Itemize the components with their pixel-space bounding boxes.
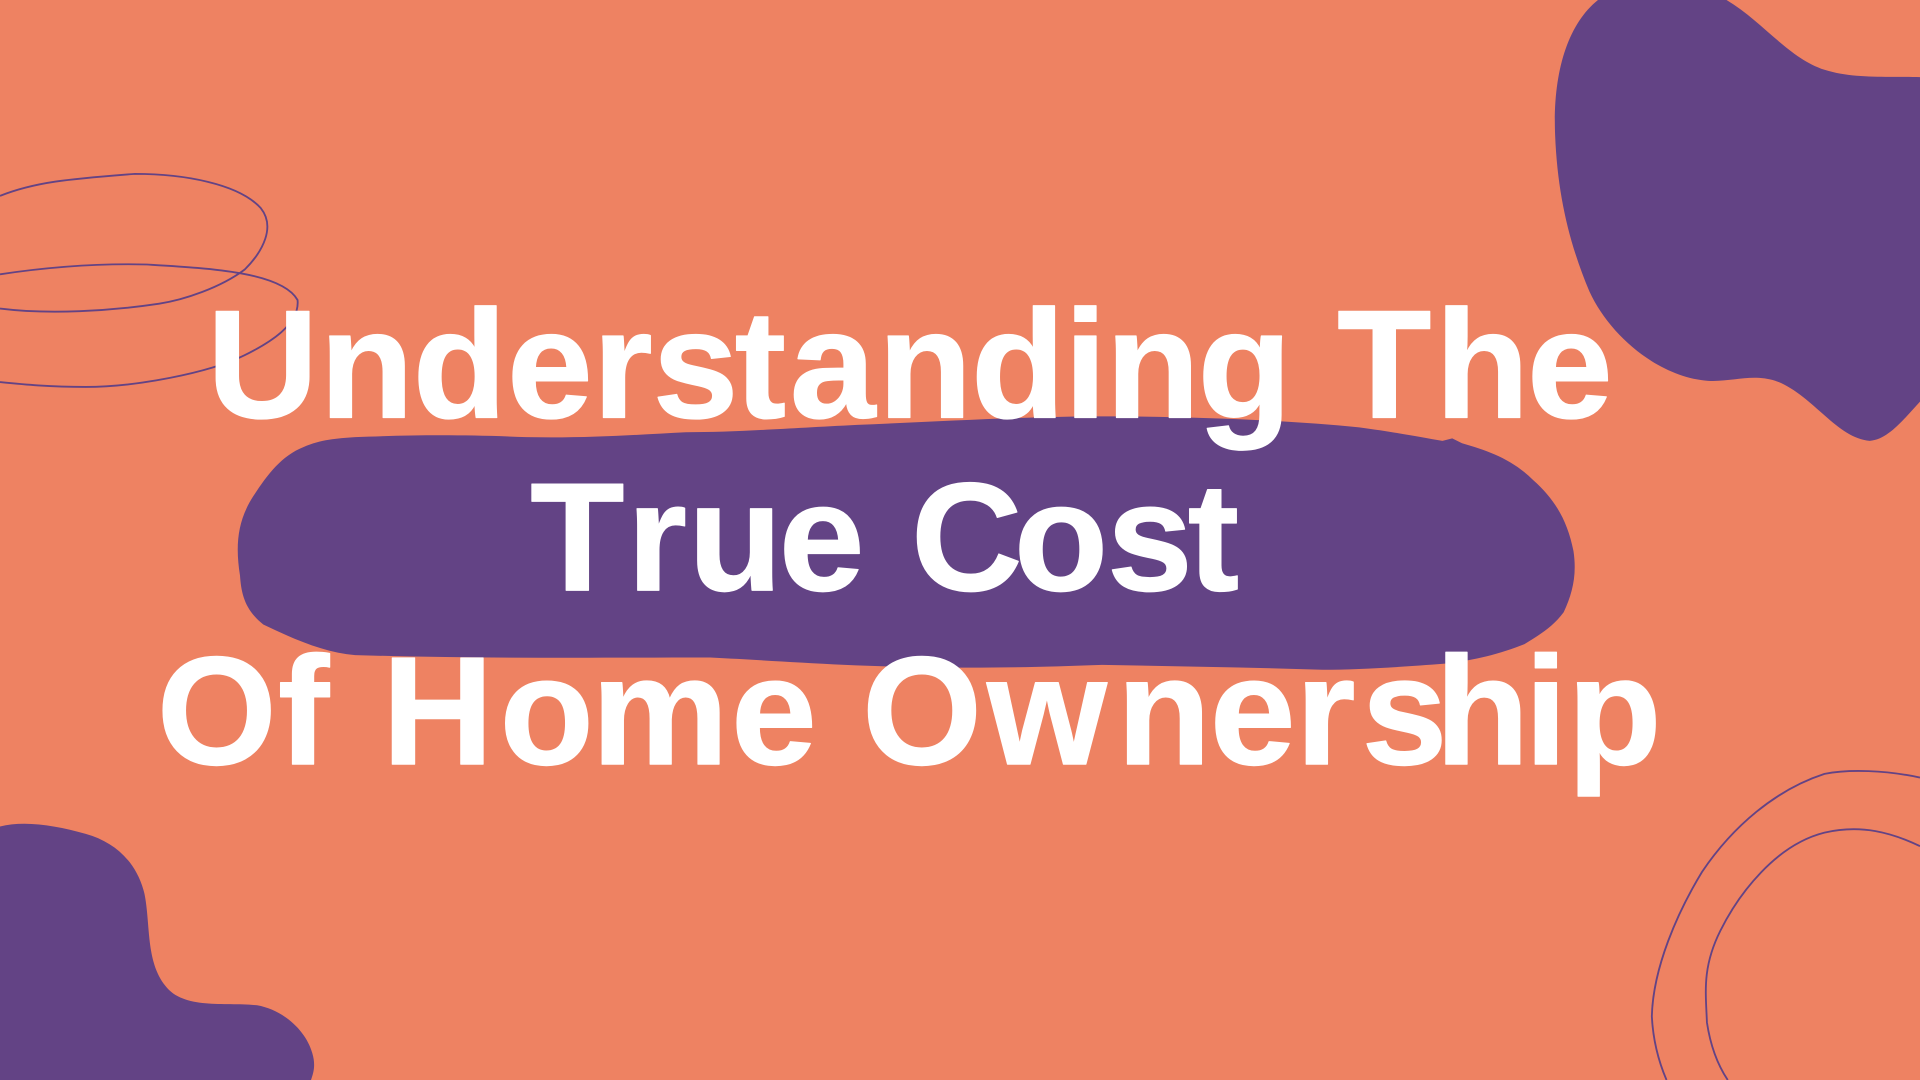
title line 3: Home — [382, 624, 817, 797]
title line 2: True — [530, 450, 865, 623]
title line 2 — [530, 450, 1239, 623]
scribble: top left loops — [0, 174, 298, 387]
blob: top right — [1555, 0, 1920, 441]
scribble: bottom right arcs — [1652, 771, 1920, 1080]
title line 1: The — [1337, 278, 1613, 451]
blob: centre brush stroke — [238, 416, 1575, 670]
title line 2: Cost — [911, 450, 1239, 623]
title line 3: Of — [157, 624, 330, 797]
title line 1: Understanding — [207, 278, 1292, 451]
blob: bottom left — [0, 824, 314, 1080]
title — [157, 278, 1662, 797]
title line 3 — [157, 624, 1662, 797]
title line 3: Ownership — [862, 624, 1662, 797]
